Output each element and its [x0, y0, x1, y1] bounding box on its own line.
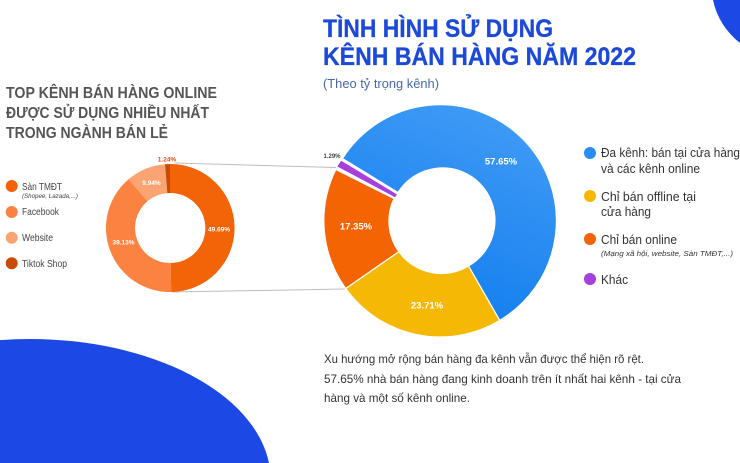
main title: KÊNH BÁN HÀNG NĂM 2022	[323, 41, 636, 71]
legend item: Chỉ bán offline: cửa hàng	[601, 204, 651, 219]
slice: Khác	[337, 161, 397, 197]
legend item: Tiktok Shop: Tiktok Shop	[22, 259, 67, 270]
slice: Sàn TMĐT	[170, 164, 235, 292]
small donut chart	[106, 156, 235, 292]
slice: Chỉ bán offline	[346, 252, 500, 337]
legend item: Website: Website	[22, 233, 53, 244]
right legend	[584, 145, 740, 287]
left heading: TOP KÊNH BÁN HÀNG ONLINE	[6, 83, 217, 102]
legend item: Facebook: Facebook	[22, 207, 60, 218]
legend item: Chỉ bán online	[584, 232, 734, 258]
small donut value labels: 49.69%	[208, 226, 230, 234]
connector lines between donuts	[172, 163, 345, 292]
large donut chart	[323, 105, 556, 337]
main title: TÌNH HÌNH SỬ DỤNG	[323, 13, 553, 43]
small donut value labels: 39.13%	[112, 240, 135, 246]
large donut value labels: 57.65%	[485, 156, 518, 168]
legend item: Đa kênh	[584, 145, 740, 176]
left heading	[6, 83, 217, 142]
slice: Website	[129, 164, 167, 201]
subtitle: (Theo tỷ trọng kênh)	[323, 76, 439, 91]
slice: Chỉ bán online	[324, 170, 399, 288]
decoration: top-right blue circle	[713, 0, 740, 43]
small donut value labels: 1.24%	[158, 156, 176, 164]
legend item: Sàn TMĐT: (Shopee, Lazada,...)	[22, 193, 78, 200]
description paragraph: 57.65% nhà bán hàng đang kinh doanh trên ít nhất hai kênh - tại cửa	[324, 372, 681, 386]
main title	[323, 13, 636, 71]
legend item: Chỉ bán offline	[584, 189, 696, 219]
small donut value labels	[112, 156, 230, 246]
legend item: Khác	[584, 272, 628, 287]
legend item: Chỉ bán online: Chỉ bán online	[601, 232, 677, 247]
legend item: Khác: Khác	[601, 272, 628, 287]
decoration: bottom-left blue ellipse	[0, 339, 269, 463]
description paragraph: hàng và một số kênh online.	[324, 391, 470, 405]
left heading: ĐƯỢC SỬ DỤNG NHIỀU NHẤT	[6, 103, 209, 122]
legend item: Chỉ bán online: (Mạng xã hội, website, Sàn TMĐT,...)	[601, 249, 734, 258]
large donut value labels: 23.71%	[411, 300, 444, 312]
legend item: Đa kênh: và các kênh online	[601, 161, 700, 176]
description paragraph: Xu hướng mở rộng bán hàng đa kênh vẫn được thể hiện rõ rệt.	[324, 351, 644, 366]
slice: Facebook	[106, 179, 171, 292]
legend item: Chỉ bán offline: Chỉ bán offline tại	[601, 189, 696, 204]
large donut value labels	[323, 154, 518, 312]
slice: Đa kênh	[342, 105, 556, 320]
left legend	[6, 180, 78, 270]
left heading: TRONG NGÀNH BÁN LẺ	[6, 123, 168, 142]
legend item: Sàn TMĐT: Sàn TMĐT	[22, 182, 62, 193]
large donut value labels: 1.29%	[323, 154, 341, 160]
legend item: Sàn TMĐT	[6, 180, 78, 200]
small donut value labels: 9.94%	[142, 180, 161, 187]
slice: Tiktok Shop	[165, 164, 170, 193]
large donut value labels: 17.35%	[340, 222, 373, 232]
description paragraph	[324, 351, 681, 405]
